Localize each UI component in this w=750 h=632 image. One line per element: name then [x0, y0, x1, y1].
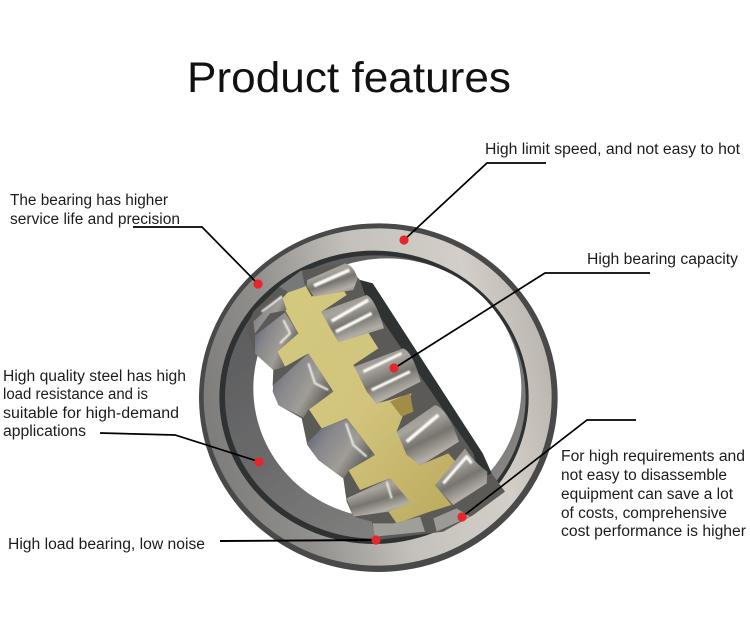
label: cost performance: equipment can save a lot — [561, 486, 734, 503]
marker dots — [253, 235, 467, 545]
inner race back edge — [360, 280, 492, 478]
label: cost performance — [561, 448, 746, 540]
label: high quality steel: High quality steel has high — [3, 368, 186, 385]
label: high quality steel: suitable for high-demand — [3, 405, 179, 422]
roller group — [253, 263, 487, 537]
leader: low noise — [220, 540, 376, 541]
cage dark window — [390, 393, 413, 417]
label: cost performance: not easy to disassemble — [561, 467, 727, 484]
roller 4 — [397, 405, 459, 466]
leader: bearing capacity — [393, 273, 650, 369]
label: service life and precision: service life and precision — [10, 211, 180, 228]
label: service life and precision — [10, 192, 180, 228]
label: high quality steel — [3, 368, 186, 440]
title: Product features — [187, 54, 511, 102]
roller seat backing — [247, 263, 505, 540]
outer ring — [199, 223, 558, 572]
roller 2 — [321, 295, 384, 342]
roller 6 — [253, 295, 287, 333]
leader: high limit speed — [404, 163, 546, 240]
label: cost performance: of costs, comprehensive — [561, 505, 727, 522]
label: cost performance: For high requirements and — [561, 448, 745, 465]
roller 5 — [435, 448, 487, 505]
bearing photo illustration — [199, 223, 558, 572]
label: high quality steel: applications — [3, 423, 86, 440]
roller 9 — [307, 419, 375, 478]
label: high limit speed: High limit speed, and not easy to hot — [485, 141, 741, 158]
roller 12 — [433, 508, 470, 532]
label: high load bearing: High load bearing, low noise — [8, 536, 205, 553]
roller 8 — [273, 353, 333, 418]
bearing bore opening — [253, 258, 521, 518]
roller 7 — [255, 312, 298, 370]
roller 3 — [354, 348, 421, 404]
label: high bearing capacity: High bearing capacity — [587, 251, 738, 268]
label: high quality steel: load resistance and is — [3, 386, 148, 403]
roller 1 — [307, 263, 358, 297]
cage — [270, 285, 458, 523]
roller 10 — [347, 478, 411, 517]
leader: service life — [133, 227, 258, 284]
cage front top tab — [279, 270, 305, 292]
label: service life and precision: The bearing has higher — [10, 192, 168, 209]
roller 11 — [373, 517, 425, 537]
leader: high quality steel — [100, 433, 260, 462]
leader: cost — [462, 420, 636, 517]
label: cost performance: cost performance is higher — [561, 523, 746, 540]
